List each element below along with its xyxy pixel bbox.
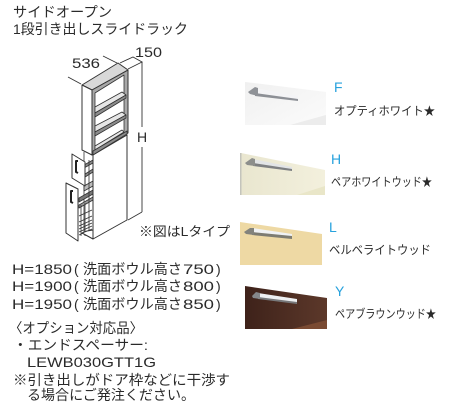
handle L	[244, 228, 292, 239]
label Y	[335, 283, 436, 321]
label Y: Y	[335, 283, 345, 299]
height options: 洗面ボウル高さ	[83, 296, 182, 312]
dimension labels: 536	[72, 55, 100, 71]
option notes: 〈オプション対応品〉	[9, 320, 143, 336]
figure note: ※図はLタイプ	[139, 224, 230, 239]
slide rack interior	[79, 152, 93, 236]
cabinet top panel	[82, 63, 128, 90]
height options: )	[216, 278, 221, 294]
height options: 800	[183, 278, 214, 294]
height options: H=1950	[12, 296, 72, 312]
handle Y	[252, 292, 297, 304]
title: 1段引き出しスライドラック	[13, 21, 188, 37]
label L	[329, 219, 431, 257]
dimension lines	[68, 56, 142, 220]
cabinet base	[82, 230, 93, 239]
label H: H	[331, 151, 341, 167]
cabinet diagram	[66, 63, 128, 241]
height options: 750	[183, 261, 214, 277]
handle F	[248, 87, 298, 101]
dimension labels: 150	[135, 44, 162, 60]
option notes: ※引き出しがドア枠などに干渉す	[13, 372, 230, 388]
swatch H	[240, 153, 325, 195]
option notes: ・エンドスペーサー:	[13, 337, 148, 353]
height options	[12, 261, 221, 312]
height options: (	[74, 296, 79, 312]
option notes	[9, 320, 230, 403]
label F: F	[334, 79, 343, 95]
label F	[334, 79, 435, 118]
height options: 850	[183, 296, 214, 312]
label Y: ペアブラウンウッド★	[335, 306, 436, 321]
option notes: LEWB030GTT1G	[27, 354, 156, 370]
height options: )	[216, 261, 221, 277]
swatch Y	[245, 286, 327, 329]
label F: オプティホワイト★	[334, 104, 435, 118]
middle drawer door	[72, 154, 85, 186]
dimension labels: H	[137, 129, 147, 145]
label L: L	[329, 219, 337, 235]
title: サイドオープン	[13, 4, 112, 20]
upper door	[82, 85, 92, 155]
handle H	[245, 158, 292, 171]
height options: H=1900	[12, 278, 72, 294]
label L: ベルベライトウッド	[329, 243, 431, 257]
lower drawer door	[66, 183, 78, 241]
height options: 洗面ボウル高さ	[83, 261, 182, 277]
dimension labels	[72, 44, 162, 145]
height options: 洗面ボウル高さ	[83, 278, 182, 294]
label H	[331, 151, 432, 189]
height options: (	[74, 278, 79, 294]
cabinet body side panel	[93, 135, 127, 239]
option notes: る場合にご発注ください。	[27, 387, 195, 403]
label H: ペアホワイトウッド★	[331, 175, 432, 189]
title	[13, 4, 188, 37]
height options: (	[74, 261, 79, 277]
swatch F	[245, 82, 326, 125]
swatch L	[240, 222, 322, 265]
upper shelf frame	[92, 70, 128, 155]
height options: )	[216, 296, 221, 312]
height options: H=1850	[12, 261, 72, 277]
